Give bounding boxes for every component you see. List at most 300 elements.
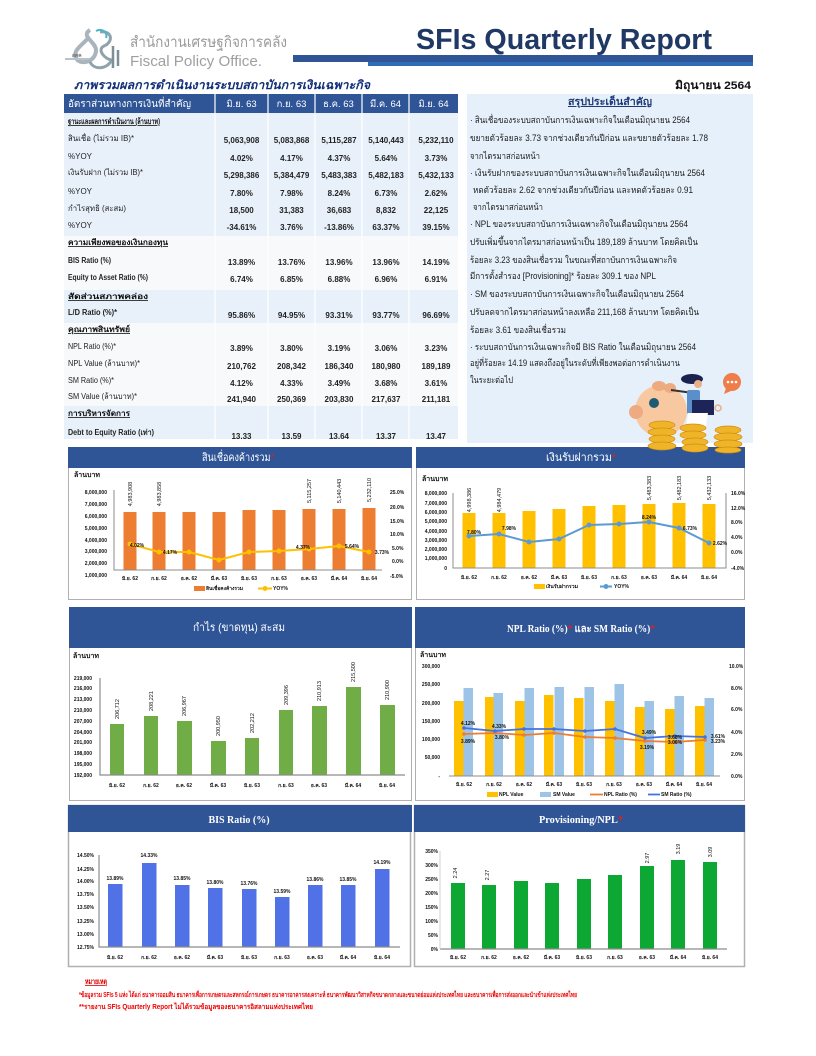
highlights text: จากไตรมาสก่อนหน้า xyxy=(470,151,540,161)
axis labels: ก.ย. 62 xyxy=(151,576,167,582)
line chart: deposits YOY xyxy=(466,515,728,547)
highlights text: · NPL ของระบบสถาบันการเงินเฉพาะกิจในเดือนมิถุนายน 2564 xyxy=(470,219,688,230)
axis labels: 1,000,000 xyxy=(425,556,447,562)
section: asset quality: 4.33% xyxy=(280,379,303,388)
legend: YOY% xyxy=(614,584,630,590)
table header: มิ.ย. 64 xyxy=(418,99,449,110)
axis labels: 13.00% xyxy=(77,932,95,938)
illustration: woman on piggy bank with coins xyxy=(629,373,741,448)
axis labels: 13.25% xyxy=(77,919,95,925)
section: asset quality: 3.68% xyxy=(375,379,397,388)
legend xyxy=(487,792,692,798)
section: performance: %YOY xyxy=(68,152,93,161)
section: performance: 3.73% xyxy=(425,154,447,163)
axis labels: 100% xyxy=(425,919,439,925)
axis labels: 13.50% xyxy=(77,905,95,911)
section: performance: เงินรับฝาก (ไม่รวม IB)* xyxy=(68,168,143,177)
section: asset quality: 3.80% xyxy=(280,344,303,353)
footnotes xyxy=(79,977,577,1012)
section: capital adequacy: 6.85% xyxy=(280,275,303,284)
section: performance: 5,298,386 xyxy=(224,171,260,180)
legend: NPL Ratio (%) xyxy=(604,792,637,798)
bar values: 14.33% xyxy=(141,853,158,859)
table header: มิ.ย. 63 xyxy=(226,99,257,110)
section: debt xyxy=(68,409,447,441)
axis labels: 1,000,000 xyxy=(85,573,107,579)
panel: key highlights xyxy=(467,94,753,443)
axis labels: มิ.ย. 62 xyxy=(456,781,472,788)
section: capital adequacy: Equity to Asset Ratio (%) xyxy=(68,273,148,282)
section: capital adequacy: 13.96% xyxy=(325,258,353,267)
section: asset quality: 241,940 xyxy=(227,395,257,404)
axis labels: ก.ย. 62 xyxy=(486,782,502,788)
axis labels: 2.0% xyxy=(731,752,743,758)
legend: สินเชื่อคงค้างรวม xyxy=(206,584,243,592)
axis labels: 2,000,000 xyxy=(425,547,447,553)
point labels: 4.33% xyxy=(492,724,507,730)
section: capital adequacy: 6.91% xyxy=(425,275,447,284)
axis labels xyxy=(77,853,390,961)
legend: เงินรับฝากรวม xyxy=(546,583,578,590)
section: asset quality: 3.06% xyxy=(375,344,397,353)
section: asset quality: SM Ratio (%)* xyxy=(68,376,114,385)
rotated bar values: 5,482,183 xyxy=(677,476,683,500)
axis labels: มิ.ย. 64 xyxy=(374,954,390,961)
section: asset quality: 3.89% xyxy=(230,344,253,353)
section: performance: 5,140,443 xyxy=(368,136,404,145)
highlights text xyxy=(470,113,708,385)
axis labels: ธ.ค. 63 xyxy=(639,955,655,961)
rotated bar values: 2.27 xyxy=(485,870,491,880)
section: performance: 5,083,868 xyxy=(274,136,310,145)
axis labels: ก.ย. 63 xyxy=(271,576,287,582)
highlights text: · ระบบสถาบันการเงินเฉพาะกิจมี BIS Ratio ในเดือนมิถุนายน 2564 xyxy=(470,342,696,353)
axis labels xyxy=(85,490,405,582)
section: capital adequacy: 13.89% xyxy=(228,258,255,267)
rotated bar values xyxy=(453,844,714,880)
highlights text: ปรับลดจากไตรมาสก่อนหน้าลงเหลือ 211,168 ล้านบาท โดยคิดเป็น xyxy=(470,305,699,317)
section: liquidity xyxy=(68,292,450,320)
footnotes: หมายเหตุ xyxy=(85,977,107,987)
line chart: deposits YOY: 8.24% xyxy=(642,515,657,521)
axis labels: ธ.ค. 62 xyxy=(513,955,529,961)
point labels: 3.49% xyxy=(642,730,657,736)
section: performance: %YOY xyxy=(68,187,93,196)
section: performance: ฐานะและผลการดำเนินงาน (ล้านบาท) xyxy=(68,116,160,127)
highlights text: · สินเชื่อของระบบสถาบันการเงินเฉพาะกิจในเดือนมิถุนายน 2564 xyxy=(470,113,690,126)
bar values: 14.19% xyxy=(374,860,391,866)
section: asset quality: NPL Ratio (%)* xyxy=(68,342,116,351)
axis labels: มิ.ย. 63 xyxy=(581,574,597,581)
section: asset quality: 250,369 xyxy=(277,395,307,404)
point labels: 3.68% xyxy=(668,735,683,741)
report date: มิถุนายน 2564 xyxy=(675,79,752,93)
rotated bar values: 4,983,858 xyxy=(157,482,163,506)
bar values: 13.80% xyxy=(207,880,224,886)
rotated bar values: 208,221 xyxy=(149,691,155,711)
section: debt: 13.37 xyxy=(376,432,397,441)
bar chart: profit xyxy=(110,687,395,775)
section: performance xyxy=(68,116,454,232)
axis labels: 207,000 xyxy=(74,719,92,725)
axis labels: 25.0% xyxy=(390,490,405,496)
axis labels: 4,000,000 xyxy=(85,538,107,544)
section: performance: -34.61% xyxy=(227,223,256,232)
rotated bar values xyxy=(115,662,391,736)
line chart: SM ratio xyxy=(462,726,707,740)
axis labels: ธ.ค. 62 xyxy=(516,782,532,788)
section: performance: 5,063,908 xyxy=(224,136,260,145)
section: liquidity: สัดส่วนสภาพคล่อง xyxy=(68,292,148,301)
axis labels: 13.75% xyxy=(77,892,95,898)
axis labels: ก.ย. 62 xyxy=(491,575,507,581)
axis labels: 195,000 xyxy=(74,762,92,768)
legend: NPL Value xyxy=(499,792,524,798)
axis labels: ธ.ค. 62 xyxy=(521,575,537,581)
axis labels: ก.ย. 62 xyxy=(481,955,497,961)
rotated bar values: 209,396 xyxy=(284,685,290,705)
axis labels: ธ.ค. 63 xyxy=(307,955,323,961)
axis labels: มี.ค. 64 xyxy=(331,575,347,582)
table header: มี.ค. 64 xyxy=(370,98,401,110)
rotated bar values: 215,500 xyxy=(351,662,357,682)
axis labels: มิ.ย. 63 xyxy=(244,782,260,789)
logo: Fiscal Policy Office xyxy=(65,30,287,70)
axis labels: 250% xyxy=(425,877,439,883)
axis labels xyxy=(425,491,746,581)
point labels: 3.89% xyxy=(461,739,476,745)
axis labels: - xyxy=(438,774,440,780)
section: performance: 5,483,383 xyxy=(321,171,357,180)
line chart: loans YOY xyxy=(128,542,390,562)
bar values: 13.86% xyxy=(307,877,324,883)
panel: BIS ratio chart xyxy=(68,805,412,966)
axis labels: ธ.ค. 63 xyxy=(301,576,317,582)
axis labels: 250,000 xyxy=(422,682,440,688)
section: asset quality: SM Value (ล้านบาท)* xyxy=(68,392,137,401)
axis labels: ธ.ค. 62 xyxy=(176,783,192,789)
section: performance: 18,500 xyxy=(229,206,254,215)
chart title: Provisioning/NPL* xyxy=(539,815,623,826)
line chart: loans YOY: 4.17% xyxy=(163,550,178,556)
rotated bar values: 200,950 xyxy=(216,716,222,736)
axis labels xyxy=(425,849,718,961)
point labels: 3.61% xyxy=(711,734,726,740)
section: performance: 5,384,479 xyxy=(274,171,310,180)
section: asset quality: 208,342 xyxy=(277,362,307,371)
axis labels: 20.0% xyxy=(390,505,405,511)
section: performance: 63.37% xyxy=(372,223,400,232)
section: asset quality: คุณภาพสินทรัพย์ xyxy=(68,324,130,335)
line chart: loans YOY: 4.02% xyxy=(130,543,145,549)
axis labels: 4,000,000 xyxy=(425,529,447,535)
axis labels: 8,000,000 xyxy=(425,491,447,497)
rotated bar values: 3.19 xyxy=(676,844,682,854)
axis labels: 213,000 xyxy=(74,697,92,703)
axis labels: 3,000,000 xyxy=(85,549,107,555)
chart title: NPL Ratio (%)* และ SM Ratio (%)* xyxy=(507,624,655,635)
section: performance: 6.73% xyxy=(375,189,397,198)
section: liquidity: 95.86% xyxy=(228,311,255,320)
footnotes: **รายงาน SFIs Quarterly Report ไม่ได้รวมข้อมูลของธนาคารอิสลามแห่งประเทศไทย xyxy=(79,1002,313,1012)
table header xyxy=(68,96,449,110)
axis labels: มี.ค. 63 xyxy=(210,782,226,789)
axis labels: 5.0% xyxy=(392,546,404,552)
chart title: BIS Ratio (%) xyxy=(208,815,270,826)
axis labels: มิ.ย. 62 xyxy=(450,954,466,961)
axis labels: 14.25% xyxy=(77,867,95,873)
section: liquidity: 94.95% xyxy=(278,311,305,320)
section: performance: 5,432,133 xyxy=(418,171,454,180)
line chart: loans YOY: 4.37% xyxy=(296,545,311,551)
axis labels: 0% xyxy=(431,947,439,953)
axis labels: 12.75% xyxy=(77,945,95,951)
axis labels: 0.0% xyxy=(392,559,404,565)
axis labels: 198,000 xyxy=(74,751,92,757)
axis labels: มี.ค. 63 xyxy=(546,781,562,788)
chart title: สินเชื่อคงค้างรวม* xyxy=(202,449,275,464)
axis labels: 200% xyxy=(425,891,439,897)
axis labels: มี.ค. 63 xyxy=(544,954,560,961)
axis labels xyxy=(74,676,395,789)
section: performance: -13.86% xyxy=(324,223,354,232)
axis labels: มิ.ย. 62 xyxy=(107,954,123,961)
panel: outstanding loans chart xyxy=(68,447,412,600)
axis labels: 50% xyxy=(428,933,439,939)
axis labels: ก.ย. 63 xyxy=(607,955,623,961)
axis labels: 0 xyxy=(444,566,447,572)
axis labels: ก.ย. 62 xyxy=(141,955,157,961)
highlights heading: สรุปประเด็นสำคัญ xyxy=(568,94,653,108)
axis labels: มี.ค. 63 xyxy=(207,954,223,961)
section: debt: 13.47 xyxy=(426,432,447,441)
header rule xyxy=(293,55,753,66)
bar chart: NPL value xyxy=(454,695,704,776)
section: capital adequacy: BIS Ratio (%) xyxy=(68,256,111,265)
section: performance: 31,383 xyxy=(279,206,304,215)
axis labels: 0.0% xyxy=(731,550,743,556)
highlights text: ในระยะต่อไป xyxy=(470,375,513,385)
bar values: 13.85% xyxy=(174,876,191,882)
bar chart: deposits xyxy=(462,503,716,568)
section: asset quality: 210,762 xyxy=(227,362,257,371)
section: liquidity: L/D Ratio (%)* xyxy=(68,308,118,317)
rotated bar values xyxy=(128,478,373,506)
chart title: กำไร (ขาดทุน) สะสม xyxy=(193,621,285,634)
panel: financial ratio table xyxy=(64,94,458,441)
chart title: เงินรับฝากรวม* xyxy=(546,452,617,464)
bar values: 13.59% xyxy=(274,889,291,895)
section: performance: 4.02% xyxy=(230,154,253,163)
section: debt: การบริหารจัดการ xyxy=(68,409,131,418)
axis labels: 216,000 xyxy=(74,686,92,692)
logo: Fiscal Policy Office: สำนักงานเศรษฐกิจการคลัง xyxy=(130,34,287,51)
axis labels: 6,000,000 xyxy=(425,510,447,516)
section: asset quality: 180,980 xyxy=(372,362,401,371)
highlights text: ขยายตัวร้อยละ 3.73 จากช่วงเดียวกันปีก่อน และขยายตัวร้อยละ 1.78 xyxy=(470,133,708,143)
logo: Fiscal Policy Office: Fiscal Policy Office. xyxy=(130,53,262,70)
axis labels: มิ.ย. 63 xyxy=(241,575,257,582)
rotated bar values: 210,913 xyxy=(317,681,323,701)
illustration: gold coin stacks xyxy=(648,421,742,453)
axis labels: 7,000,000 xyxy=(85,502,107,508)
axis labels: มิ.ย. 63 xyxy=(576,781,592,788)
point labels: 4.12% xyxy=(461,721,476,727)
section: capital adequacy xyxy=(68,237,450,284)
section: performance: 5.64% xyxy=(375,154,397,163)
axis labels: 15.0% xyxy=(390,519,405,525)
axis labels: 10.0% xyxy=(729,664,744,670)
axis labels: 201,000 xyxy=(74,740,92,746)
axis labels: 5,000,000 xyxy=(425,519,447,525)
section: performance: 7.80% xyxy=(230,189,253,198)
highlights text: ร้อยละ 3.61 ของสินเชื่อรวม xyxy=(470,323,566,335)
axis labels: ก.ย. 62 xyxy=(143,783,159,789)
highlights text: · SM ของระบบสถาบันการเงินเฉพาะกิจในเดือนมิถุนายน 2564 xyxy=(470,289,684,300)
section: asset quality xyxy=(68,324,451,404)
section: performance: 4.37% xyxy=(328,154,350,163)
axis labels: มิ.ย. 62 xyxy=(109,782,125,789)
section: performance: 5,232,110 xyxy=(418,136,454,145)
axis labels: -4.0% xyxy=(731,566,745,572)
panel: NPL and SM ratio chart: ล้านบาท xyxy=(420,650,446,659)
axis labels: 350% xyxy=(425,849,439,855)
table header: ธ.ค. 63 xyxy=(323,99,354,110)
section: performance: กำไรสุทธิ (สะสม) xyxy=(68,204,126,213)
rotated bar values: 206,967 xyxy=(182,696,188,716)
axis labels: มิ.ย. 62 xyxy=(122,575,138,582)
title: SFIs Quarterly Report xyxy=(416,24,712,56)
highlights text: ปรับเพิ่มขึ้นจากไตรมาสก่อนหน้าเป็น 189,189 ล้านบาท โดยคิดเป็น xyxy=(470,235,698,247)
rotated bar values: 206,712 xyxy=(115,699,121,719)
legend: SM Ratio (%) xyxy=(661,792,692,798)
section: asset quality: 186,340 xyxy=(325,362,354,371)
rotated bar values: 4,998,386 xyxy=(467,488,473,512)
table header: ก.ย. 63 xyxy=(277,99,306,110)
section: liquidity: 93.31% xyxy=(325,311,353,320)
axis labels: 150,000 xyxy=(422,719,440,725)
bar chart: loans xyxy=(124,508,376,570)
line chart: loans YOY: 3.73% xyxy=(375,550,390,556)
panel: total deposits chart xyxy=(416,447,746,600)
axis labels: ก.ย. 63 xyxy=(278,783,294,789)
bar chart: provisioning xyxy=(451,860,717,949)
section: capital adequacy: ความเพียงพอของเงินกองทุน xyxy=(68,237,169,248)
axis labels: 8,000,000 xyxy=(85,490,107,496)
axis labels: ก.ย. 63 xyxy=(606,782,622,788)
section: debt: Debt to Equity Ratio (เท่า) xyxy=(68,428,154,437)
line chart: deposits YOY: 6.73% xyxy=(683,526,698,532)
axis labels: มี.ค. 64 xyxy=(340,954,356,961)
section: capital adequacy: 13.76% xyxy=(278,258,305,267)
section: asset quality: 3.49% xyxy=(328,379,350,388)
axis labels: ธ.ค. 63 xyxy=(311,783,327,789)
section: capital adequacy: 6.88% xyxy=(328,275,350,284)
panel: NPL and SM ratio chart xyxy=(415,607,745,800)
axis labels: มี.ค. 64 xyxy=(666,781,682,788)
axis labels: 50,000 xyxy=(425,755,440,761)
section: asset quality: 3.61% xyxy=(425,379,447,388)
bar chart: SM value xyxy=(464,684,714,776)
section: asset quality: 3.19% xyxy=(328,344,350,353)
axis labels: มิ.ย. 64 xyxy=(702,954,718,961)
section: performance: 5,115,287 xyxy=(321,136,357,145)
rotated bar values xyxy=(467,476,713,512)
rotated bar values: 202,212 xyxy=(250,713,256,733)
panel: cumulative profit chart xyxy=(69,607,412,800)
axis labels: มี.ค. 64 xyxy=(670,954,686,961)
section: asset quality: NPL Value (ล้านบาท)* xyxy=(68,359,140,368)
section: asset quality: 217,637 xyxy=(372,395,401,404)
bar chart: BIS xyxy=(108,863,390,947)
highlights text: มีการตั้งสำรอง [Provisioning]* ร้อยละ 309.1 ของ NPL xyxy=(470,269,656,281)
section: debt: 13.64 xyxy=(329,432,350,441)
highlights text: จากไตรมาสก่อนหน้า xyxy=(473,202,543,212)
axis labels: 16.0% xyxy=(731,491,746,497)
axis labels: 300,000 xyxy=(422,664,440,670)
axis labels: ธ.ค. 62 xyxy=(181,576,197,582)
axis labels: 8.0% xyxy=(731,686,743,692)
section: performance: %YOY xyxy=(68,221,93,230)
table header: อัตราส่วนทางการเงินที่สำคัญ xyxy=(68,96,191,110)
axis labels xyxy=(422,664,744,788)
subtitle: ภาพรวมผลการดำเนินงานระบบสถาบันการเงินเฉพาะกิจ xyxy=(74,78,371,92)
axis labels: มี.ค. 64 xyxy=(671,574,687,581)
section: performance: 36,683 xyxy=(327,206,352,215)
axis labels: 210,000 xyxy=(74,708,92,714)
axis labels: ก.ย. 63 xyxy=(274,955,290,961)
line chart: deposits YOY: 7.80% xyxy=(467,530,482,536)
axis labels: 200,000 xyxy=(422,701,440,707)
axis labels: 2,000,000 xyxy=(85,561,107,567)
axis labels: 8.0% xyxy=(731,520,743,526)
rotated bar values: 4,984,479 xyxy=(497,488,503,512)
axis labels: 10.0% xyxy=(390,532,405,538)
point labels: 3.80% xyxy=(495,735,510,741)
point labels xyxy=(461,721,726,751)
rotated bar values: 4,983,908 xyxy=(128,482,134,506)
axis labels: 4.0% xyxy=(731,730,743,736)
axis labels: 7,000,000 xyxy=(425,501,447,507)
rotated bar values: 5,483,383 xyxy=(647,476,653,500)
logo: Fiscal Policy Office: สศค xyxy=(72,53,82,59)
highlights text: ร้อยละ 3.23 ของสินเชื่อรวม ในขณะที่สถาบันการเงินเฉพาะกิจ xyxy=(470,253,677,265)
axis labels: 12.0% xyxy=(731,506,746,512)
axis labels: 4.0% xyxy=(731,535,743,541)
section: performance: 3.76% xyxy=(280,223,303,232)
panel: outstanding loans chart: ล้านบาท xyxy=(74,470,100,479)
bar values: 13.89% xyxy=(107,876,124,882)
bar values xyxy=(107,853,391,895)
axis labels: 0.0% xyxy=(731,774,743,780)
axis labels: มิ.ย. 64 xyxy=(379,782,395,789)
axis labels: มิ.ย. 62 xyxy=(461,574,477,581)
section: asset quality: 189,189 xyxy=(422,362,451,371)
rotated bar values: 3.09 xyxy=(708,847,714,857)
axis labels: มิ.ย. 64 xyxy=(696,781,712,788)
rotated bar values: 2.24 xyxy=(453,868,459,878)
section: performance: 5,482,183 xyxy=(368,171,404,180)
line chart: deposits YOY: 2.62% xyxy=(713,541,728,547)
highlights text: หดตัวร้อยละ 2.62 จากช่วงเดียวกันปีก่อน และหดตัวร้อยละ 0.91 xyxy=(473,185,693,195)
axis labels: มิ.ย. 64 xyxy=(361,575,377,582)
section: performance: 39.15% xyxy=(422,223,450,232)
legend xyxy=(194,584,289,592)
axis labels: มิ.ย. 64 xyxy=(701,574,717,581)
highlights text: · เงินรับฝากของระบบสถาบันการเงินเฉพาะกิจในเดือนมิถุนายน 2564 xyxy=(470,168,705,179)
axis labels: 6.0% xyxy=(731,707,743,713)
axis labels: 150% xyxy=(425,905,439,911)
